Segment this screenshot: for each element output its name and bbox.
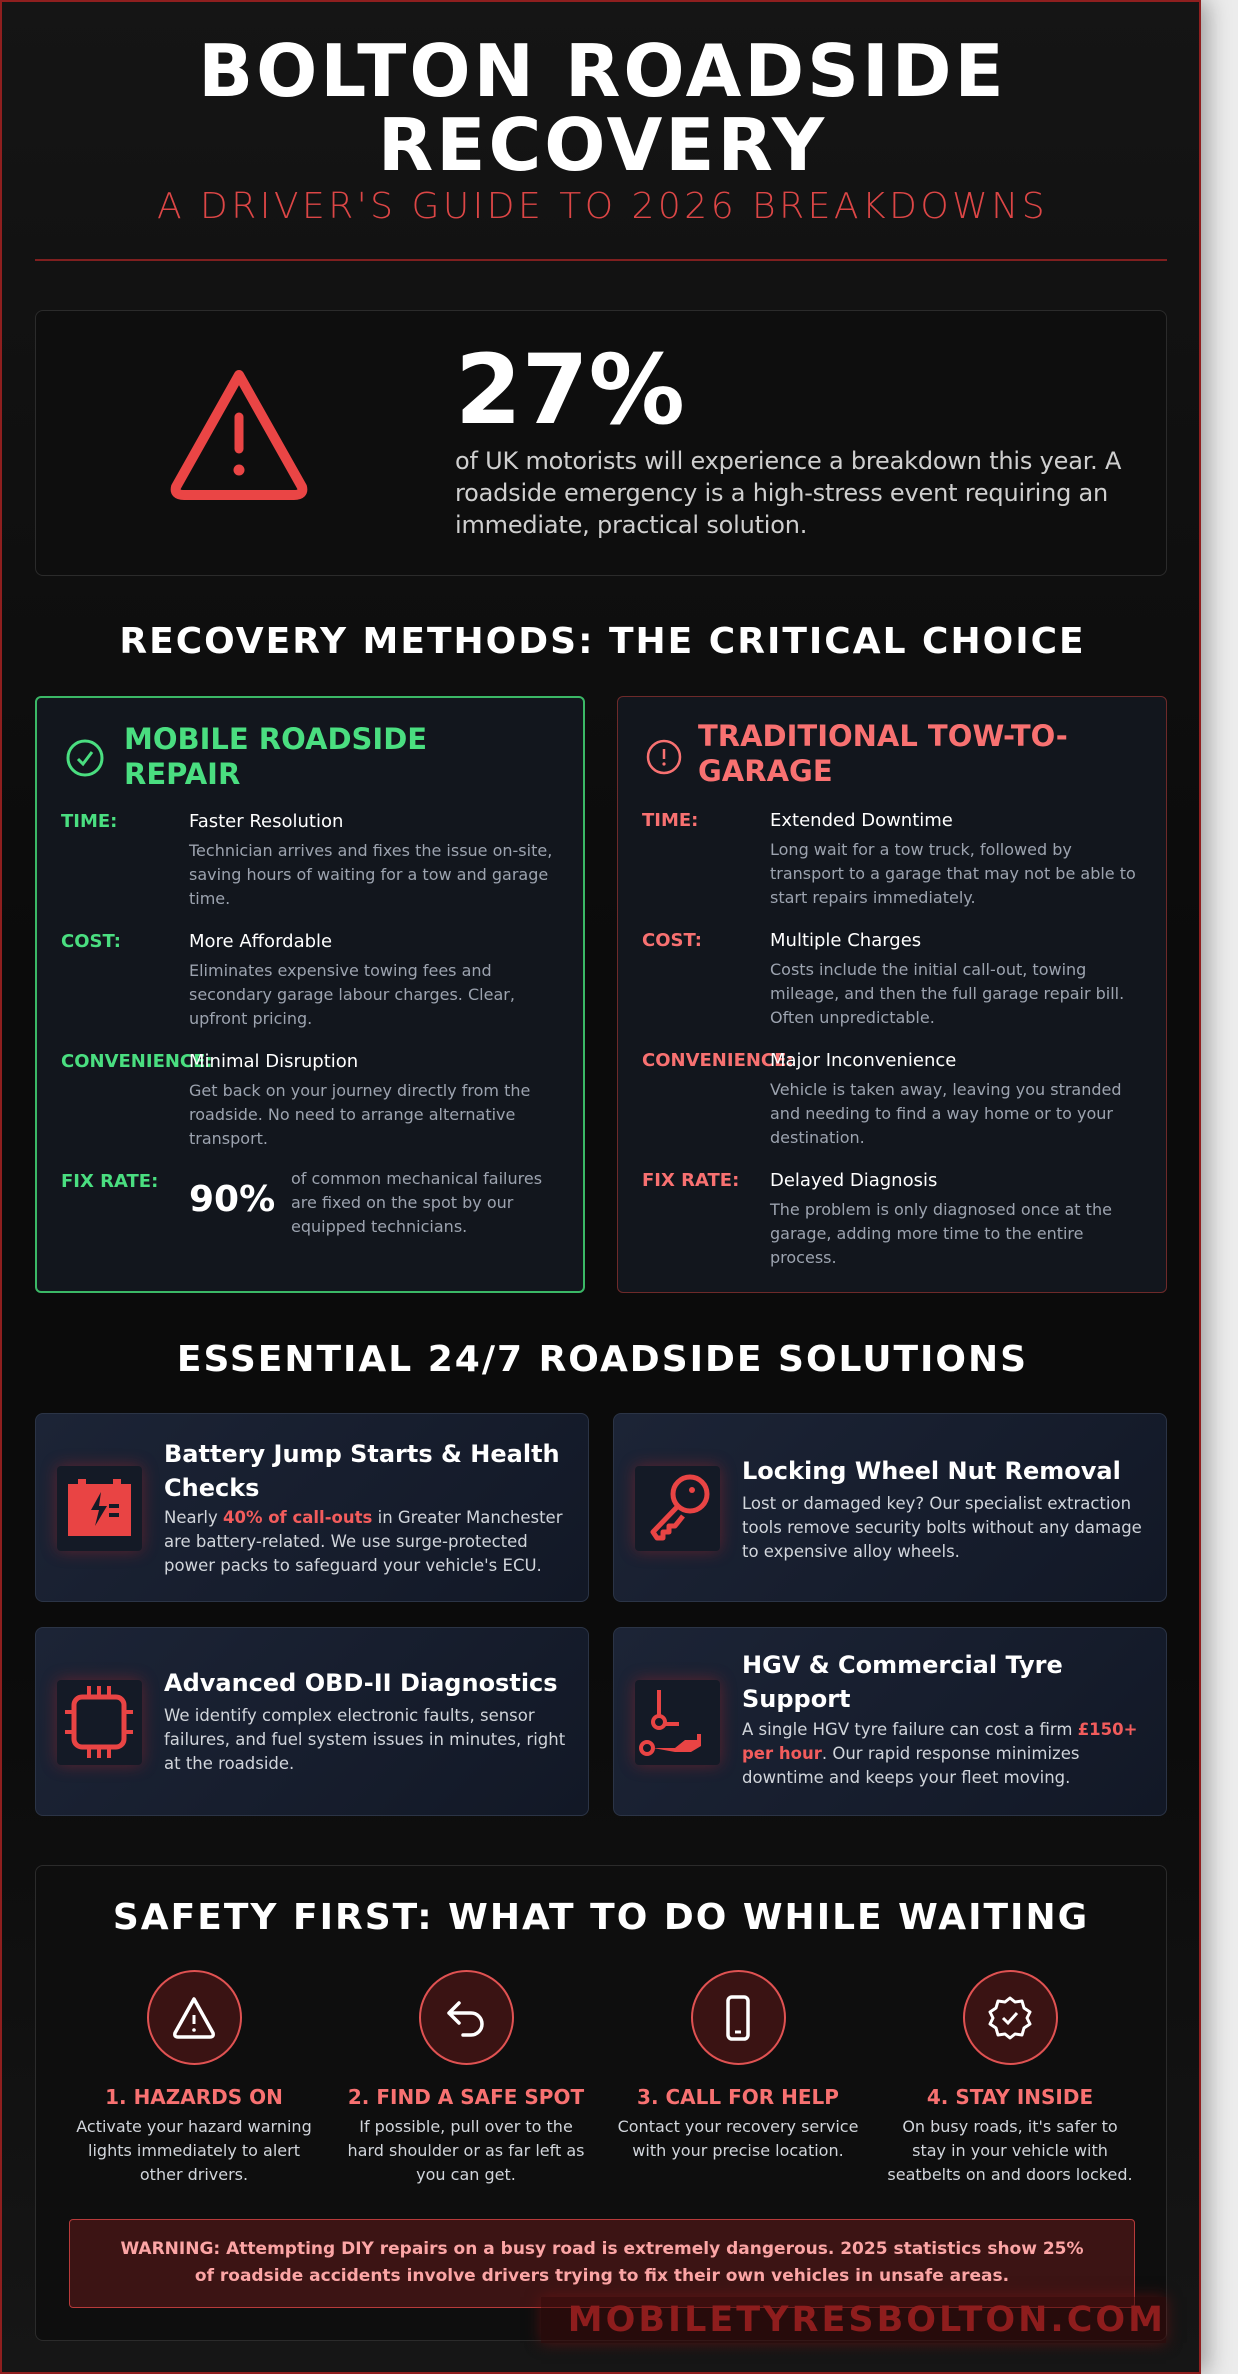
row: convenience xyxy=(61,1051,530,1148)
row: fix rate xyxy=(61,1169,542,1236)
row: convenience: Vehicle is taken away, leaving you stranded and needing to find a way home or to your destination. xyxy=(770,1080,1122,1147)
warning callout: of roadside accidents involve drivers trying to fix their own vehicles in unsafe areas. xyxy=(195,2266,1009,2286)
title xyxy=(198,29,1007,187)
row: time xyxy=(61,811,552,908)
title: RECOVERY xyxy=(378,103,827,187)
title: BOLTON ROADSIDE xyxy=(198,29,1007,113)
heading: SAFETY FIRST: WHAT TO DO WHILE WAITING xyxy=(113,1897,1089,1938)
card: battery xyxy=(35,1413,589,1602)
row: convenience: CONVENIENCE: xyxy=(642,1050,794,1071)
heading: recovery methods: RECOVERY METHODS: THE CRITICAL CHOICE xyxy=(119,621,1086,662)
card title: TRADITIONAL TOW-TO- xyxy=(698,719,1068,753)
step 2 xyxy=(348,1970,584,2184)
row: time: TIME: xyxy=(61,811,117,832)
text: We identify complex electronic faults, sensor failures, and fuel system issues in minutes, right at the roadside. xyxy=(164,1706,565,1773)
step 1: Activate your hazard warning lights immediately to alert other drivers. xyxy=(76,2117,312,2184)
card: locking wheel nut xyxy=(613,1413,1167,1602)
card title: MOBILE ROADSIDE xyxy=(124,722,427,756)
text: A single HGV tyre failure can cost a firm £150+ per hour. Our rapid response minimizes downtime and keeps your fleet moving. xyxy=(742,1720,1137,1787)
row: time: Extended Downtime xyxy=(770,810,953,831)
stat text: of UK motorists will experience a breakdown this year. A roadside emergency is a high-stress event requiring an immediate, practical solution. xyxy=(455,447,1121,539)
panel: traditional tow xyxy=(617,696,1167,1293)
stat number: 27% xyxy=(455,334,685,446)
row: time: Technician arrives and fixes the issue on-site, saving hours of waiting for a tow and garage time. xyxy=(189,841,552,908)
row: convenience: Get back on your journey directly from the roadside. No need to arrange alternative transport. xyxy=(189,1081,530,1148)
title xyxy=(742,1651,1063,1713)
icon: tow hook xyxy=(635,1680,720,1765)
icon: battery xyxy=(57,1466,142,1551)
text: Nearly 40% of call-outs in Greater Manchester are battery-related. We use surge-protected power packs to safeguard your vehicle's ECU. xyxy=(164,1508,562,1575)
row: convenience: Major Inconvenience xyxy=(770,1050,956,1071)
subtitle: A DRIVER'S GUIDE TO 2026 BREAKDOWNS xyxy=(157,186,1048,227)
row: cost xyxy=(642,930,1124,1027)
icon: key xyxy=(635,1466,720,1551)
row: time: Long wait for a tow truck, followed by transport to a garage that may not be able to start repairs immediately. xyxy=(770,840,1136,907)
row: cost: COST: xyxy=(642,930,702,951)
row: convenience xyxy=(642,1050,1122,1147)
row: cost: Eliminates expensive towing fees and secondary garage labour charges. Clear, upfront pricing. xyxy=(189,961,515,1028)
step 3: Contact your recovery service with your precise location. xyxy=(618,2117,858,2160)
row: cost: COST: xyxy=(61,931,121,952)
row: fix rate: FIX RATE: xyxy=(61,1171,158,1192)
icon: check circle xyxy=(66,740,104,776)
row: cost xyxy=(61,931,515,1028)
row: fix rate: of common mechanical failures are fixed on the spot by our equipped technicians. xyxy=(291,1169,542,1236)
icon: chip xyxy=(57,1680,142,1765)
title: Advanced OBD-II Diagnostics xyxy=(164,1669,558,1697)
card: HGV tyre xyxy=(613,1627,1167,1816)
title: HGV & Commercial Tyre xyxy=(742,1651,1063,1679)
icon: badge check xyxy=(962,1970,1058,2065)
panel: safety first xyxy=(35,1865,1167,2341)
text: Lost or damaged key? Our specialist extraction tools remove security bolts without any damage to expensive alloy wheels. xyxy=(742,1494,1142,1561)
card title: REPAIR xyxy=(124,757,240,791)
warning callout: WARNING: Attempting DIY repairs on a busy road is extremely dangerous. 2025 statistics show 25% xyxy=(120,2239,1084,2259)
step 1 xyxy=(76,1970,312,2184)
card title xyxy=(124,722,427,791)
heading: solutions: ESSENTIAL 24/7 ROADSIDE SOLUTIONS xyxy=(177,1339,1028,1380)
row: fix rate: 90% xyxy=(189,1179,275,1220)
step 3: 3. CALL FOR HELP xyxy=(637,2085,839,2109)
row: convenience: CONVENIENCE: xyxy=(61,1051,213,1072)
step 4 xyxy=(887,1970,1133,2184)
icon: alert circle xyxy=(646,740,682,774)
row: fix rate xyxy=(642,1170,1112,1267)
warning callout xyxy=(69,2219,1135,2308)
panel: stat xyxy=(35,310,1167,576)
icon: warning triangle xyxy=(170,370,308,500)
icon: hazard xyxy=(146,1970,242,2065)
card title: GARAGE xyxy=(698,754,833,788)
row: time: TIME: xyxy=(642,810,698,831)
title: Locking Wheel Nut Removal xyxy=(742,1457,1121,1485)
row: cost: Costs include the initial call-out, towing mileage, and then the full garage repair bill. Often unpredictable. xyxy=(770,960,1124,1027)
row: cost: Multiple Charges xyxy=(770,930,921,951)
panel: mobile roadside repair xyxy=(35,696,585,1293)
row: fix rate: Delayed Diagnosis xyxy=(770,1170,937,1191)
watermark: MOBILETYRESBOLTON.COM xyxy=(568,2300,1166,2340)
title: Battery Jump Starts & Health xyxy=(164,1440,560,1468)
icon: phone xyxy=(690,1970,786,2065)
row: fix rate: FIX RATE: xyxy=(642,1170,739,1191)
row: time: Faster Resolution xyxy=(189,811,343,832)
step 2: 2. FIND A SAFE SPOT xyxy=(348,2085,584,2109)
row: convenience: Minimal Disruption xyxy=(189,1051,358,1072)
card: diagnostics xyxy=(35,1627,589,1816)
title: Checks xyxy=(164,1474,259,1502)
card title xyxy=(698,719,1068,788)
step 4: On busy roads, it's safer to stay in your vehicle with seatbelts on and doors locked. xyxy=(887,2117,1133,2184)
row: fix rate: The problem is only diagnosed once at the garage, adding more time to the entire process. xyxy=(770,1200,1112,1267)
row: cost: More Affordable xyxy=(189,931,332,952)
icon: return arrow xyxy=(418,1970,514,2065)
step 4: 4. STAY INSIDE xyxy=(927,2085,1093,2109)
step 3 xyxy=(618,1970,858,2160)
row: time xyxy=(642,810,1136,907)
title xyxy=(164,1440,560,1502)
step 1: 1. HAZARDS ON xyxy=(105,2085,283,2109)
step 2: If possible, pull over to the hard shoulder or as far left as you can get. xyxy=(348,2117,584,2184)
title: Support xyxy=(742,1685,851,1713)
